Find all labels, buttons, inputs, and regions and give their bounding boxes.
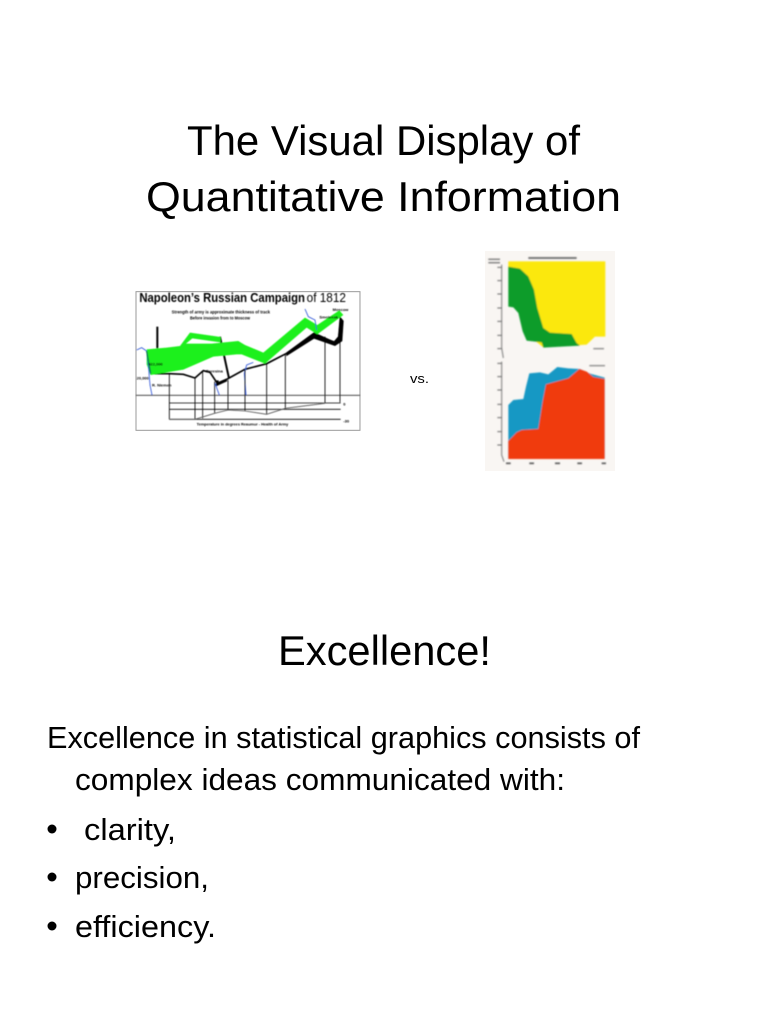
chart title: Napoleon’s Russian Campaign [139, 291, 305, 305]
labels: Temperature in degrees Reaumur - Health of Army [197, 421, 289, 426]
text block: excellence definition: Excellence in statistical graphics consists of [47, 720, 640, 755]
labels: 20,000 [137, 375, 150, 380]
title: Quantitative Information [146, 173, 621, 220]
title: The Visual Display of [187, 117, 580, 164]
upper area chart [488, 258, 605, 358]
chart: Napoleon's Russian Campaign of 1812: of 1812 [307, 291, 346, 305]
bullet list: clarity, [84, 812, 176, 847]
chart: Napoleon's Russian Campaign of 1812 [136, 291, 360, 430]
retreat line [150, 317, 343, 384]
labels: Moscow [333, 307, 349, 312]
labels [137, 307, 350, 426]
temperature chart [136, 337, 360, 419]
lower area chart [497, 362, 606, 463]
text block: excellence definition [47, 720, 640, 797]
rivers [137, 309, 317, 395]
chart subtitle: Strength of army is approximate thickness of track [172, 309, 271, 314]
heading: Excellence: Excellence! [278, 627, 491, 674]
chart subtitle: Before invasion from to Moscow [190, 315, 251, 320]
labels: 422,000 [148, 361, 164, 366]
advance band [147, 310, 343, 375]
label: vs.: vs. [410, 371, 429, 386]
chart subtitle [172, 309, 271, 320]
labels: Smolensk [319, 314, 339, 319]
labels: -30 [343, 418, 350, 423]
labels: 0 [343, 402, 346, 407]
bullet list [48, 812, 216, 944]
text block: excellence definition: complex ideas communicated with: [75, 762, 565, 797]
title [146, 117, 621, 220]
bullet list: precision, [75, 860, 209, 895]
chart: Playfair area charts [485, 251, 615, 471]
bullet list: efficiency. [75, 909, 216, 944]
labels: Beresina [206, 369, 224, 374]
labels: R. Niemen [152, 383, 172, 388]
